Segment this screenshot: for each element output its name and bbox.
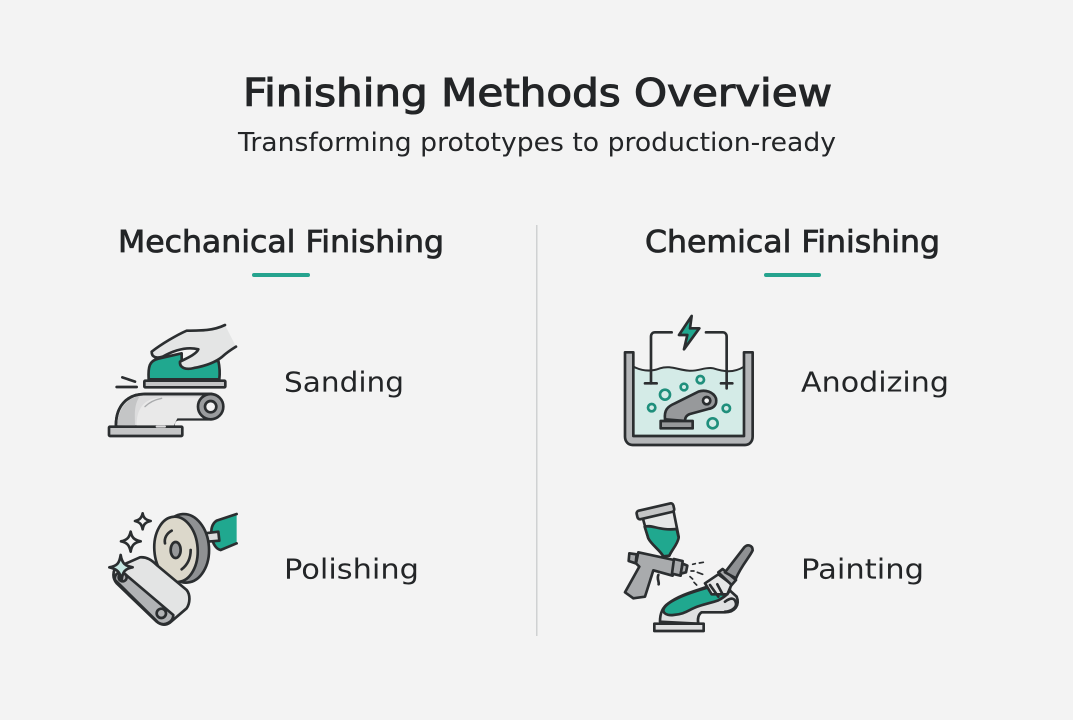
panel: mechanical finishing: [109, 225, 444, 625]
label: polishing: Polishing: [284, 552, 419, 586]
heading underline: [764, 273, 821, 277]
icon: anodizing: [625, 316, 753, 445]
label: anodizing: Anodizing: [801, 366, 949, 398]
subtitle: Transforming prototypes to production-ready: [237, 128, 836, 158]
title: Finishing Methods Overview: [243, 71, 832, 116]
heading: mechanical finishing: Mechanical Finishing: [118, 225, 444, 260]
heading: chemical finishing: Chemical Finishing: [645, 225, 940, 260]
icon: sanding: [109, 325, 236, 436]
label: painting: Painting: [801, 552, 924, 586]
heading underline: [252, 273, 310, 277]
label: sanding: Sanding: [284, 366, 404, 398]
icon: polishing: [109, 512, 237, 625]
panel: chemical finishing: [625, 225, 949, 631]
icon: painting: [625, 503, 753, 631]
